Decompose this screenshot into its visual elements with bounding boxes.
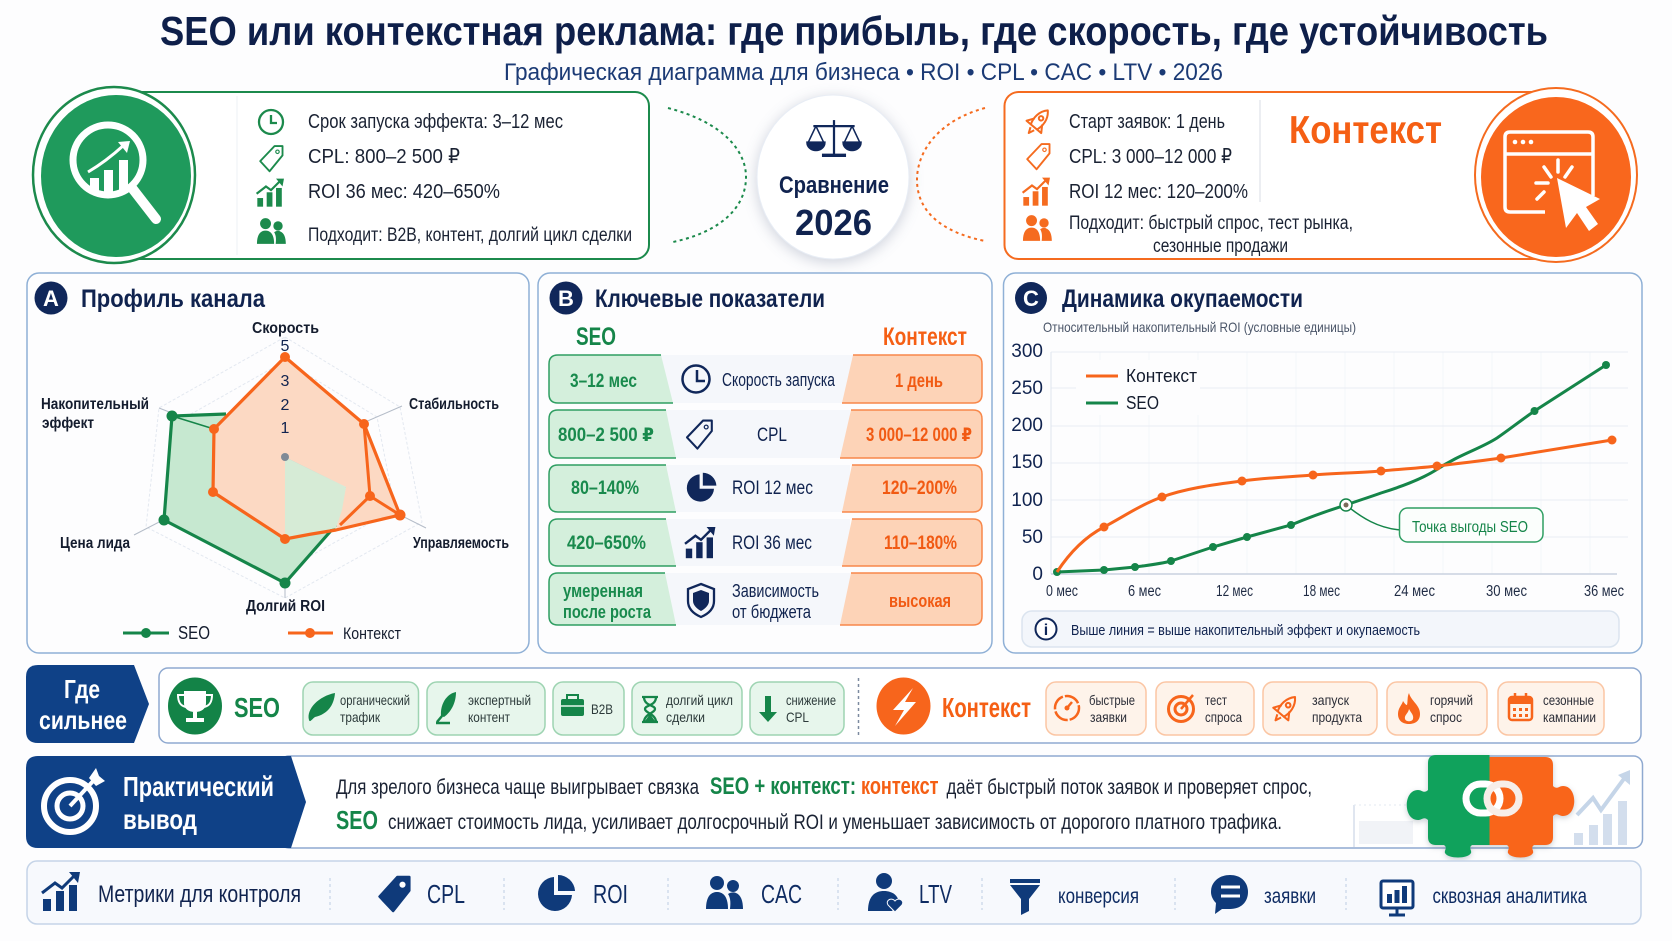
- metric: CAC: CAC: [761, 879, 802, 909]
- icon: trophy: [168, 678, 222, 734]
- metric: end-to-end analytics: сквозная аналитика: [1432, 885, 1587, 908]
- row: budget dependency: умеренная: [563, 581, 643, 601]
- radar legend: Контекст: [343, 624, 401, 643]
- row: launch speed: 1 день: [895, 371, 943, 392]
- tag: takeaway: Практический: [123, 771, 274, 802]
- context roi: ROI 12 мес: 120–200%: [1069, 181, 1248, 203]
- y axis labels: [1011, 341, 1043, 585]
- chart legend: Контекст: [1126, 366, 1197, 386]
- column head SEO: SEO: [576, 323, 616, 351]
- center comparison badge: [757, 95, 909, 259]
- faint chart right: [1574, 770, 1630, 845]
- context cpl: CPL: 3 000–12 000 ₽: [1069, 146, 1232, 168]
- subtitle: Графическая диаграмма для бизнеса • ROI • CPL • CAC • LTV • 2026: [504, 59, 1223, 86]
- seo launch time: Срок запуска эффекта: 3–12 мес: [308, 111, 563, 133]
- row: ROI 12: [549, 465, 982, 512]
- radar axis labels: Долгий ROI: [246, 598, 325, 615]
- x axis labels: 36 мес: [1584, 583, 1624, 600]
- icon: growth chart: [1023, 178, 1050, 206]
- badge C: C: [1023, 286, 1039, 311]
- chip: long deal cycle: [632, 682, 742, 735]
- row: launch speed: 3–12 мес: [570, 371, 637, 392]
- icon: bolt: [876, 678, 930, 734]
- metric: LTV: LTV: [919, 879, 952, 909]
- panel: context card: [1004, 88, 1637, 262]
- SEO label: SEO: [234, 692, 280, 723]
- chip: hot demand: [1387, 682, 1487, 735]
- icon: target: [44, 768, 105, 832]
- radar scale: [281, 338, 290, 437]
- row: budget dependency: Зависимость: [732, 581, 819, 601]
- metric: conversion: [1010, 879, 1139, 915]
- row: launch speed: [549, 355, 982, 403]
- row: ROI 36: 420–650%: [567, 533, 646, 554]
- x axis labels: 6 мес: [1128, 583, 1161, 600]
- seo cpl: CPL: 800–2 500 ₽: [308, 146, 460, 168]
- badge A: A: [43, 286, 59, 311]
- radar scale: 3: [281, 373, 290, 390]
- chip: demand test: спроса: [1205, 709, 1242, 725]
- x axis labels: 30 мес: [1486, 583, 1527, 600]
- context line: [1057, 436, 1616, 572]
- chip: product launch: продукта: [1312, 709, 1362, 725]
- row: CPL: 800–2 500 ₽: [558, 425, 654, 446]
- radar points: [158, 410, 290, 588]
- chip: product launch: [1263, 682, 1377, 735]
- row: CPL: CPL: [757, 425, 787, 446]
- icon: growth chart: [257, 179, 284, 207]
- badge A: [34, 282, 68, 314]
- y axis labels: 100: [1011, 490, 1043, 511]
- icon: tag: [260, 146, 283, 171]
- context heading: Контекст: [1289, 109, 1442, 152]
- metric: ROI: [538, 875, 628, 911]
- info note: i: [1044, 622, 1048, 639]
- badge C: [1015, 282, 1047, 314]
- seo polygon: [164, 414, 350, 583]
- icon: people: [1023, 215, 1052, 241]
- panel A: channel profile: [27, 273, 529, 653]
- label tag: where stronger: Где: [64, 674, 100, 704]
- chart legend: SEO: [1126, 393, 1159, 413]
- metric: leads: заявки: [1264, 885, 1316, 908]
- row: CPL: 3 000–12 000 ₽: [866, 425, 972, 446]
- context start: Старт заявок: 1 день: [1069, 111, 1225, 133]
- label tag: where stronger: [26, 665, 149, 743]
- chip: organic traffic: [303, 682, 418, 735]
- metric: CAC: [706, 876, 802, 909]
- chip: fast leads: заявки: [1090, 709, 1127, 725]
- radar axis labels: Стабильность: [409, 396, 499, 413]
- radar legend: SEO: [178, 623, 210, 643]
- radar axis labels: [41, 320, 509, 615]
- chip: expert content: экспертный: [468, 692, 531, 708]
- panel C: payback dynamics: [1004, 273, 1642, 653]
- chip: expert content: контент: [468, 709, 510, 725]
- chip: CPL reduction: CPL: [786, 709, 809, 725]
- chip: fast leads: быстрые: [1089, 692, 1135, 708]
- badge B: B: [558, 286, 574, 311]
- icon: clock: [259, 110, 283, 134]
- row: launch speed: Скорость запуска: [722, 370, 836, 390]
- year: 2026: [795, 202, 872, 243]
- chip: CPL reduction: снижение: [786, 692, 836, 708]
- radar axis labels: Цена лида: [60, 535, 130, 552]
- panel B: key metrics: [538, 273, 992, 653]
- tag: takeaway: вывод: [123, 804, 197, 835]
- radar axis labels: Скорость: [252, 320, 319, 337]
- chip: long deal cycle: долгий цикл: [666, 692, 733, 708]
- metric: LTV: [868, 873, 952, 912]
- callout: SEO benefit point: [1340, 499, 1543, 542]
- radar scale: 2: [281, 397, 290, 414]
- chip: demand test: [1156, 682, 1254, 735]
- heading C: Динамика окупаемости: [1062, 285, 1303, 313]
- takeaway text: SEO + контекст:: [710, 773, 856, 800]
- icon: tag: [1027, 144, 1050, 169]
- x axis labels: 0 мес: [1046, 583, 1078, 600]
- takeaway text: SEO: [336, 805, 378, 835]
- y axis labels: 150: [1011, 452, 1043, 473]
- radar scale: 1: [281, 420, 290, 437]
- chip: B2B: [553, 682, 624, 735]
- context fit: сезонные продажи: [1153, 236, 1288, 257]
- icon: puzzle: [1407, 755, 1574, 858]
- panel: metrics to control: [27, 861, 1641, 924]
- row: ROI 36: 110–180%: [884, 533, 957, 554]
- row: CPL: [549, 410, 982, 458]
- metric: CPL: [380, 877, 465, 911]
- context fit: Подходит: быстрый спрос, тест рынка,: [1069, 213, 1353, 234]
- metrics heading: Метрики для контроля: [98, 881, 301, 908]
- y axis labels: 250: [1011, 378, 1043, 399]
- icon: people: [257, 218, 286, 244]
- takeaway text: контекст: [861, 773, 939, 800]
- metric: CPL: CPL: [427, 879, 465, 909]
- radar legend: [123, 623, 401, 643]
- x axis labels: 24 мес: [1394, 583, 1435, 600]
- x axis labels: [1046, 583, 1624, 600]
- radar axis labels: Накопительный: [41, 396, 149, 413]
- panel: practical takeaway: [26, 755, 1642, 858]
- icon: scales: [807, 120, 861, 155]
- context polygon: [213, 357, 400, 539]
- row: ROI 12: ROI 12 мес: [732, 478, 813, 499]
- icon: SEO magnifier badge: [33, 87, 195, 263]
- chip: organic traffic: трафик: [340, 709, 381, 725]
- y axis labels: 0: [1032, 564, 1043, 585]
- seo fit: Подходит: B2B, контент, долгий цикл сделки: [308, 224, 632, 246]
- context fit: [1069, 213, 1353, 257]
- row: budget dependency: после роста: [563, 602, 652, 622]
- row: budget dependency: от бюджета: [732, 602, 812, 622]
- chip: hot demand: спрос: [1430, 709, 1462, 725]
- column head context: Контекст: [883, 323, 967, 351]
- context label: Контекст: [942, 692, 1031, 723]
- icon: rocket: [1021, 104, 1055, 139]
- chip: organic traffic: органический: [340, 692, 410, 708]
- comparison label: Сравнение: [779, 172, 889, 199]
- chip: seasonal campaigns: кампании: [1543, 709, 1596, 725]
- y axis labels: 300: [1011, 341, 1043, 362]
- metric: end-to-end analytics: [1381, 881, 1587, 915]
- badge B: [550, 282, 582, 314]
- chart legend: [1076, 360, 1200, 415]
- chip: expert content: [427, 682, 545, 735]
- chip: hot demand: горячий: [1430, 692, 1473, 708]
- label tag: where stronger: сильнее: [39, 705, 127, 735]
- chip: seasonal campaigns: [1498, 682, 1604, 735]
- chip: seasonal campaigns: сезонные: [1543, 692, 1594, 708]
- info note: Выше линия = выше накопительный эффект и окупаемость: [1071, 622, 1420, 639]
- takeaway text: [336, 773, 1312, 835]
- faint chart left: [1354, 805, 1420, 847]
- radar chart: [41, 320, 509, 615]
- panel: strengths: [159, 668, 1641, 743]
- callout: SEO benefit point: Точка выгоды SEO: [1412, 519, 1528, 536]
- takeaway text: Для зрелого бизнеса чаще выигрывает связка: [336, 775, 699, 799]
- row: ROI 36: ROI 36 мес: [732, 533, 812, 554]
- info note: [1022, 611, 1619, 647]
- y axis labels: 200: [1011, 415, 1043, 436]
- arrow: dashed arc orange: [917, 108, 985, 241]
- row: budget dependency: высокая: [889, 591, 951, 611]
- chip: B2B: B2B: [591, 701, 613, 717]
- takeaway text: даёт быстрый поток заявок и проверяет спрос,: [946, 775, 1312, 799]
- row: ROI 12: 80–140%: [571, 478, 639, 499]
- chip: demand test: тест: [1205, 692, 1227, 708]
- row: ROI 12: 120–200%: [882, 478, 957, 499]
- metric: leads: [1211, 875, 1316, 914]
- icon: metrics chart: [42, 872, 80, 911]
- takeaway text: снижает стоимость лида, усиливает долгосрочный ROI и уменьшает зависимость от дорогого платного трафика.: [388, 810, 1282, 834]
- icon: browser click badge: [1475, 88, 1637, 262]
- metric: ROI: ROI: [593, 879, 628, 909]
- chip: long deal cycle: сделки: [666, 709, 705, 725]
- row: ROI 36: [549, 519, 982, 566]
- x axis labels: 12 мес: [1216, 583, 1253, 600]
- chip: product launch: запуск: [1312, 692, 1350, 708]
- seo roi: ROI 36 мес: 420–650%: [308, 181, 500, 203]
- radar axis labels: эффект: [42, 415, 94, 432]
- line chart: [1011, 341, 1628, 600]
- x axis labels: 18 мес: [1303, 583, 1340, 600]
- row: budget dependency: [549, 573, 982, 625]
- chart subtitle: Относительный накопительный ROI (условные единицы): [1043, 319, 1356, 335]
- chip: CPL reduction: [750, 682, 844, 735]
- seo line: [1053, 361, 1610, 576]
- arrow: dashed arc green: [668, 108, 746, 242]
- chip: fast leads: [1046, 682, 1146, 735]
- heading A: Профиль канала: [81, 285, 266, 313]
- panel: SEO card: [33, 87, 649, 263]
- radar axis labels: Управляемость: [413, 535, 509, 552]
- radar scale: 5: [281, 338, 290, 355]
- metric: conversion: конверсия: [1058, 885, 1139, 908]
- tag: takeaway: [26, 756, 306, 848]
- heading B: Ключевые показатели: [595, 285, 825, 313]
- y axis labels: 50: [1022, 527, 1043, 548]
